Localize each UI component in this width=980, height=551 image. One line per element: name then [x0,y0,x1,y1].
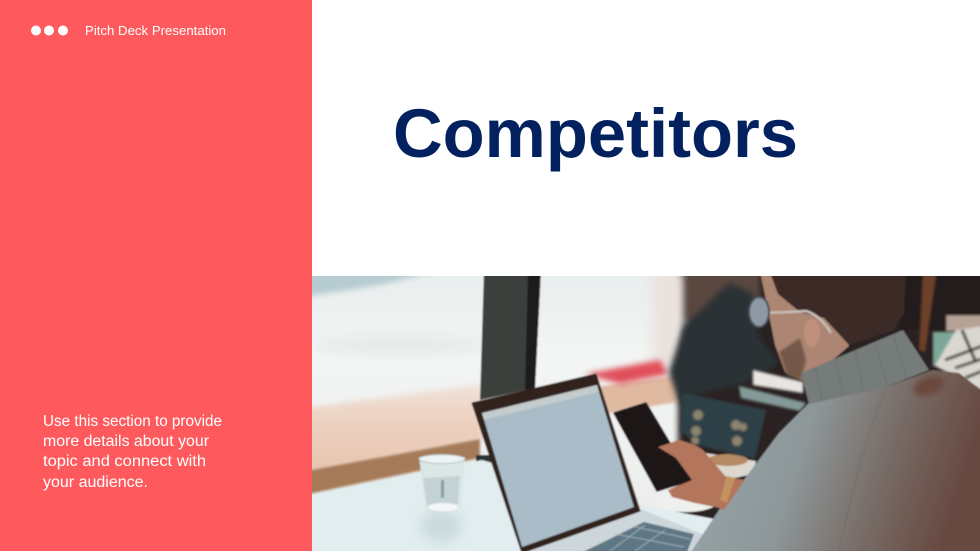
stack of papers [753,370,803,393]
ear [804,319,820,347]
laptop [472,374,712,551]
background coat [669,283,779,404]
bracelet [720,476,735,502]
beard [779,338,806,380]
glass of water [419,454,465,542]
sweater seam [838,390,886,551]
phone [614,403,692,491]
panel: coral sidebar [0,0,312,551]
text block: section description: topic and connect with [43,453,206,470]
hand [657,439,726,508]
glasses [749,297,831,333]
text block: section description: your audience. [43,474,148,491]
browser toolbar [482,385,599,420]
text block: section description [43,413,222,491]
photo: man using phone and laptop in a cafe [305,270,980,551]
coffee cup [705,453,756,478]
face [761,270,849,380]
saucer [672,497,714,514]
shelf [739,386,806,411]
window background [312,276,681,509]
window pillar [476,270,541,467]
text block: section description: Use this section to provide [43,413,222,430]
shoulder shadow [912,374,945,398]
title: Competitors [393,95,798,172]
handbag [680,393,766,459]
laptop base and keyboard [532,509,702,551]
turtleneck collar [801,330,929,404]
icon: three dots [31,26,68,36]
laptop screen [482,385,634,547]
wooden deck [305,360,678,499]
background objects on right [919,270,980,392]
table top [305,460,720,551]
hair [769,270,906,345]
wrist [718,478,745,510]
sweater [689,370,980,551]
text block: section description: more details about your [43,433,209,450]
man [614,270,980,551]
laptop lid [472,374,640,551]
header label: Pitch Deck Presentation [85,23,226,38]
blurred cafe interior [650,276,980,520]
photo contents [305,270,980,551]
